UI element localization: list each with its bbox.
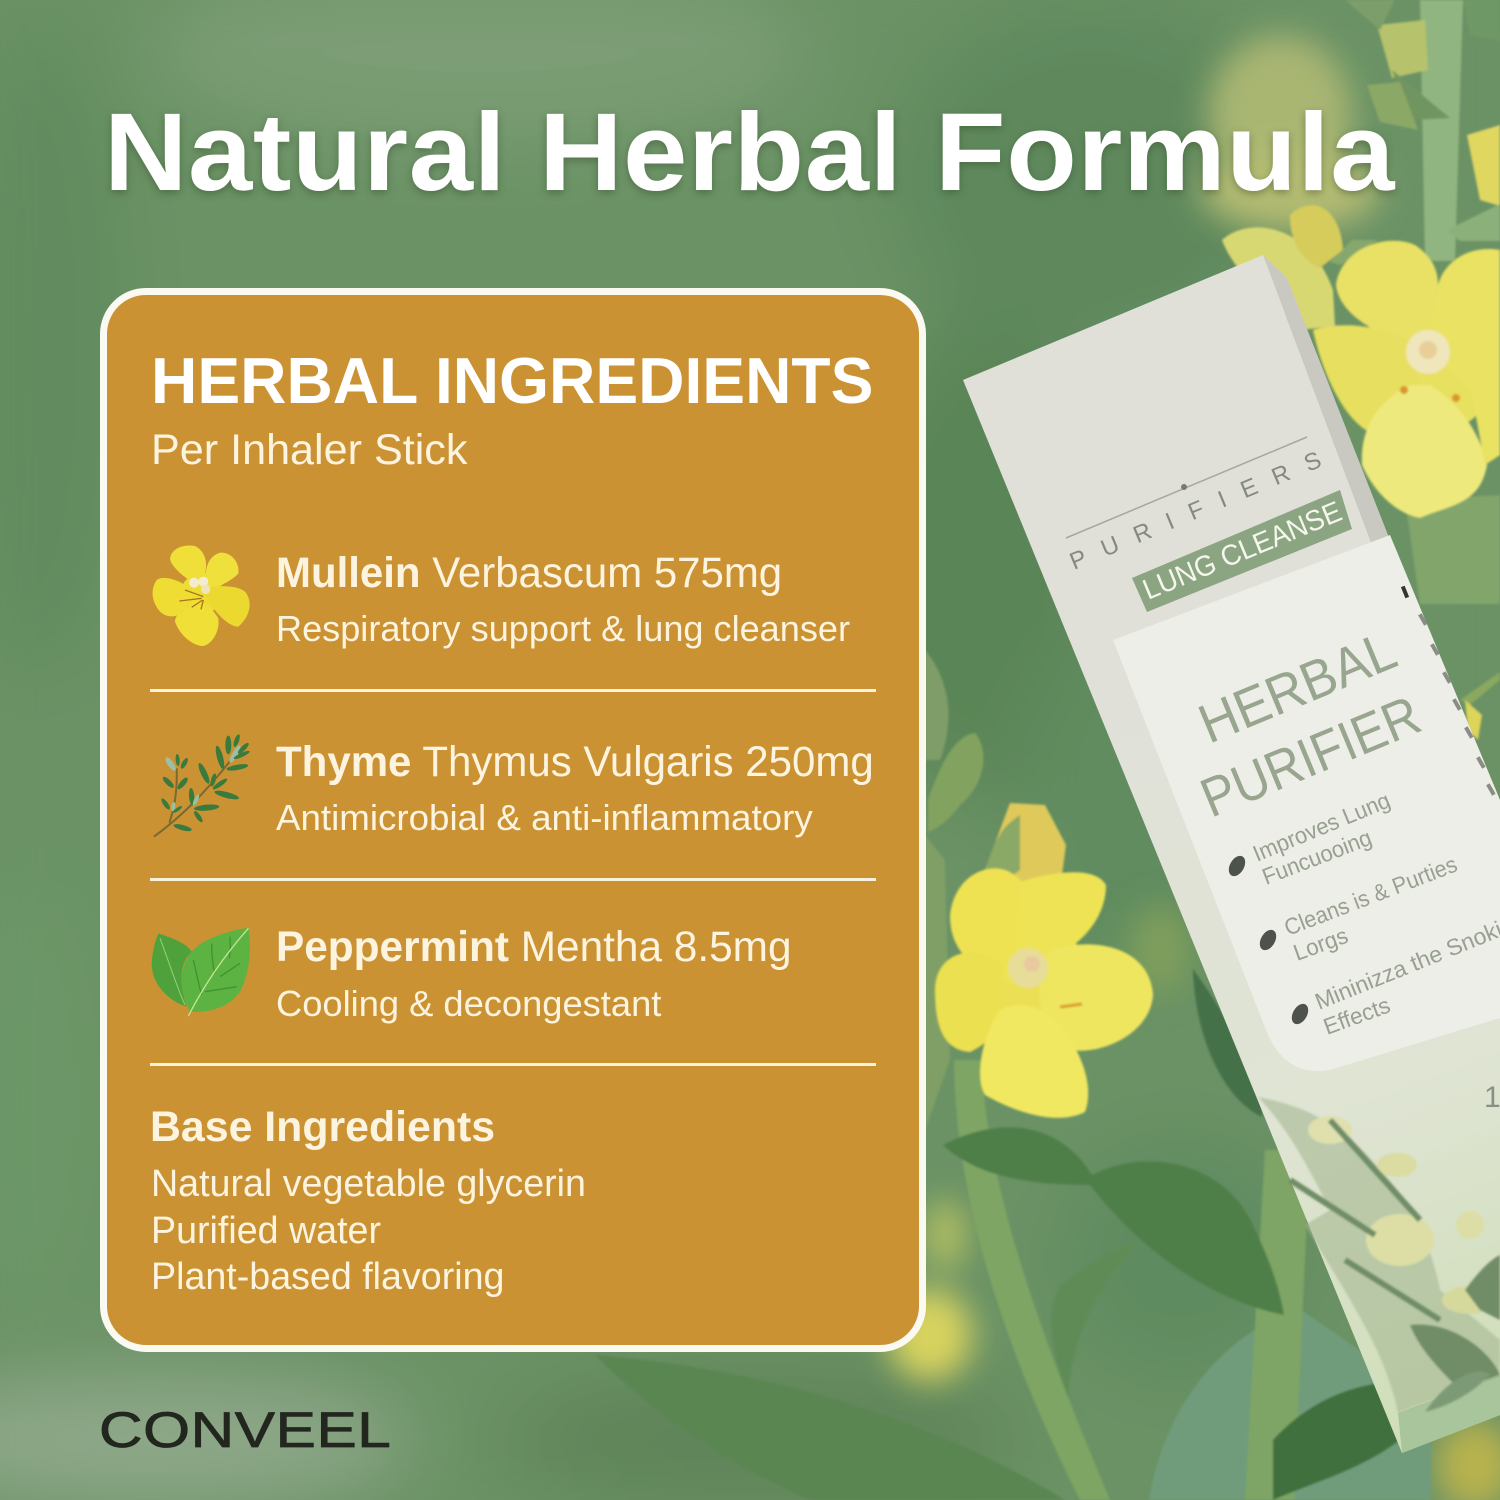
box text: PURIFIERS — [1066, 446, 1325, 576]
text: thyme benefit: Antimicrobial & anti-inflammatory — [276, 797, 813, 838]
flower: lower yellow mullein — [935, 803, 1153, 1118]
box text — [1066, 446, 1500, 1114]
logo: Conveel: CONVEEL — [99, 1402, 391, 1458]
text: base ingredient list: Natural vegetable glycerin — [151, 1163, 586, 1205]
text: peppermint: Peppermint Mentha 8.5mg — [276, 923, 792, 971]
text: mullein benefit: Respiratory support & lung cleanser — [276, 608, 850, 649]
text: base ingredient list: Purified water — [151, 1210, 381, 1252]
icon: peppermint leaves — [152, 928, 250, 1016]
title: Natural Herbal Formula — [104, 91, 1395, 214]
text: mullein: Mullein Verbascum 575mg — [276, 549, 782, 597]
text: base ingredient list: Plant-based flavoring — [151, 1256, 504, 1298]
box text: Funcuooing — [1258, 824, 1375, 890]
divider — [150, 689, 876, 692]
subheading: Per Inhaler Stick — [151, 426, 467, 474]
text: base ingredient list — [151, 1163, 586, 1298]
box green band — [1132, 490, 1352, 612]
box text: LUNG CLEANSE — [1138, 496, 1347, 606]
heading: base ingredients: Base Ingredients — [150, 1103, 495, 1151]
product box — [963, 255, 1500, 1453]
box botanical print — [1258, 1097, 1500, 1413]
text: peppermint benefit: Cooling & decongestant — [276, 983, 661, 1024]
divider — [150, 1063, 876, 1066]
text: thyme: Thyme Thymus Vulgaris 250mg — [276, 738, 874, 786]
plant stems and leaves — [595, 0, 1500, 1500]
heading: herbal ingredients: HERBAL INGREDIENTS — [151, 344, 873, 417]
box white label panel — [1113, 535, 1500, 1071]
icon: mullein flower — [152, 546, 250, 646]
box text: Effects — [1320, 992, 1394, 1040]
box text: Lorgs — [1290, 922, 1351, 966]
panel: herbal ingredients — [100, 288, 926, 1352]
box text: HERBAL — [1190, 619, 1405, 755]
divider — [150, 878, 876, 881]
box text: PURIFIER — [1192, 683, 1429, 829]
box text: Improves Lung — [1249, 787, 1394, 867]
box text: Cleans is & Purties — [1280, 851, 1461, 941]
flower: upper yellow mullein — [1222, 205, 1500, 518]
icon: thyme sprig — [154, 734, 250, 838]
